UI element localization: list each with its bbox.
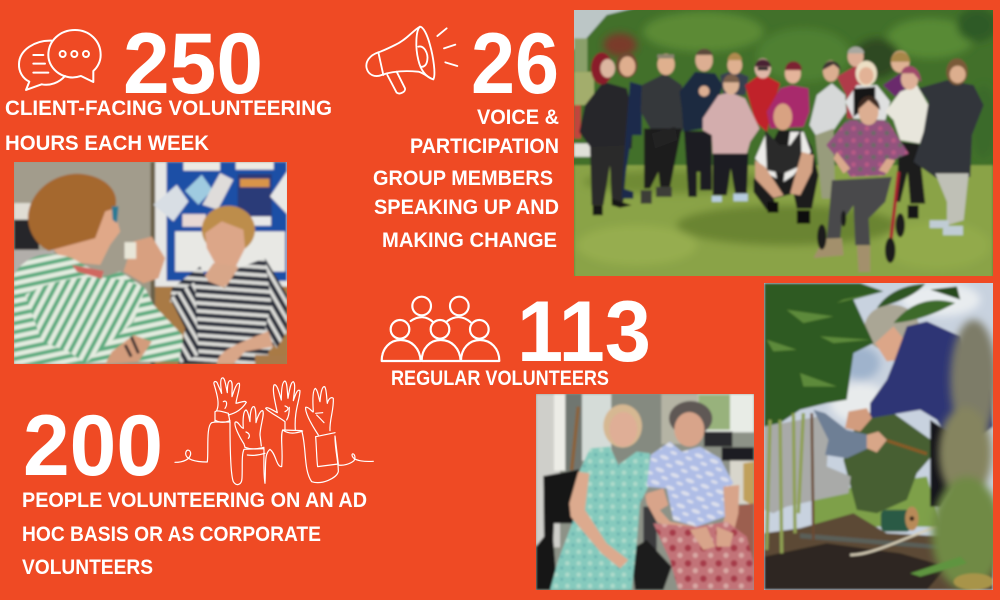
icon: speech bubbles [19, 30, 101, 90]
number 200: 200 [23, 398, 163, 494]
label [373, 106, 559, 252]
label: GROUP MEMBERS [373, 167, 553, 190]
label: VOICE & [477, 106, 559, 129]
stat: 26 voice and participation [366, 16, 559, 252]
label [22, 489, 367, 579]
soil [764, 513, 993, 590]
left woman [603, 404, 642, 448]
photo: two volunteers gardening [764, 283, 993, 590]
label: HOC BASIS OR AS CORPORATE [22, 523, 321, 546]
stat: 200 ad hoc and corporate volunteers [22, 378, 373, 579]
crouching man [753, 130, 819, 210]
left woman [52, 188, 120, 265]
right woman [669, 401, 712, 436]
icon: raised hands line drawing [175, 378, 373, 485]
label: CLIENT-FACING VOLUNTEERING [5, 97, 332, 120]
number 26: 26 [471, 16, 559, 112]
icon: group of people [382, 297, 499, 361]
label: HOURS EACH WEEK [5, 132, 209, 155]
photo: two older women seated [536, 394, 754, 590]
label: MAKING CHANGE [382, 229, 557, 252]
photo: group of people on a lawn [574, 10, 993, 276]
stat: 113 regular volunteers [382, 284, 651, 390]
people [579, 82, 633, 150]
number 250: 250 [123, 16, 263, 112]
number 113: 113 [517, 284, 651, 380]
woman in purple [864, 305, 919, 351]
label: VOLUNTEERS [22, 556, 153, 579]
crouching person [764, 416, 851, 513]
label: PEOPLE VOLUNTEERING ON AN AD [22, 489, 367, 512]
plant behind [843, 413, 940, 513]
seated woman [826, 120, 909, 177]
label: SPEAKING UP AND [374, 196, 559, 219]
stat: 250 client-facing volunteering hours [5, 16, 332, 155]
chair [536, 469, 579, 590]
label: PARTICIPATION [410, 135, 559, 158]
upper leaves [877, 284, 925, 308]
walker [890, 172, 899, 245]
spool [881, 510, 911, 532]
left plant [764, 283, 884, 426]
foreground right plant [932, 320, 1000, 590]
icon: megaphone [366, 27, 457, 93]
label: REGULAR VOLUNTEERS [391, 367, 609, 390]
photo: two women talking with a mug [14, 162, 287, 364]
right woman [202, 206, 255, 254]
label [5, 97, 332, 155]
